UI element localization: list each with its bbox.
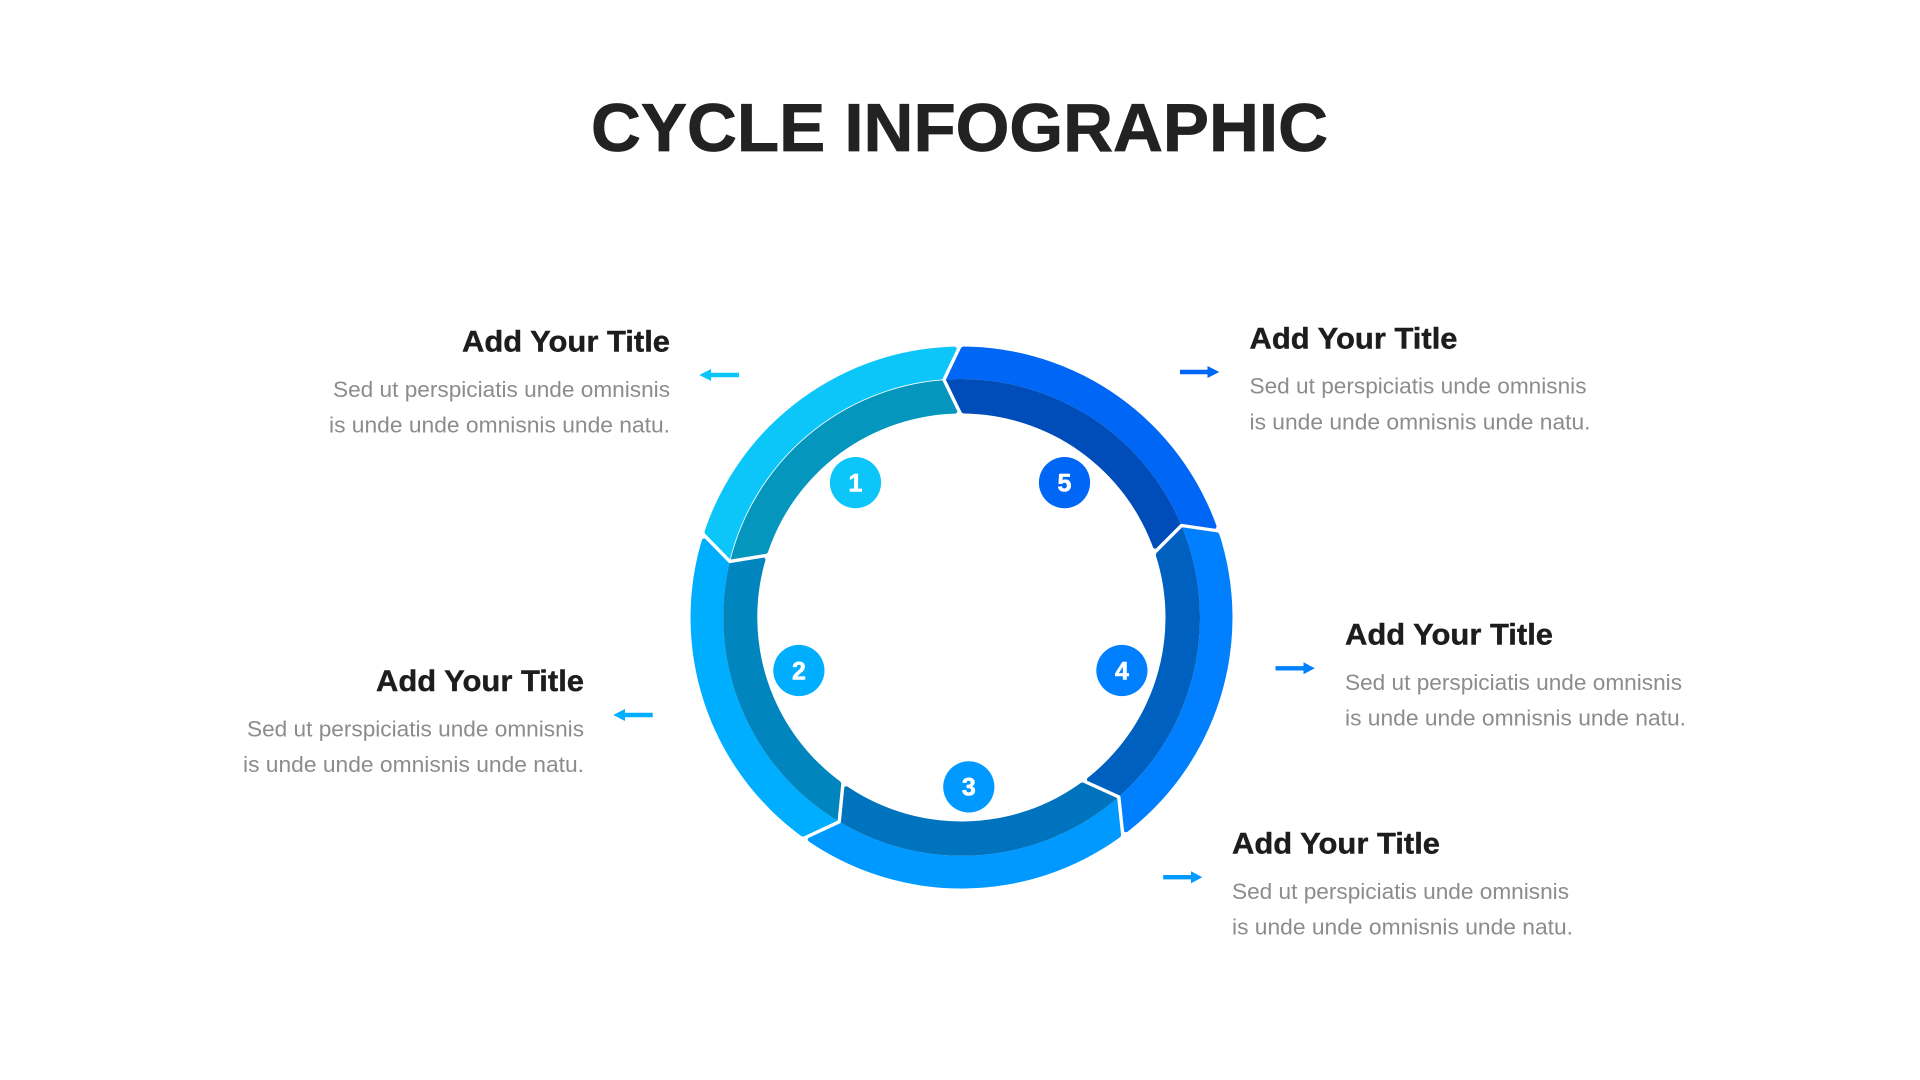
body 1: Sed ut perspiciatis unde omnisnis (333, 377, 670, 402)
body 5: Sed ut perspiciatis unde omnisnis (1250, 374, 1586, 398)
text block 1 (329, 326, 670, 438)
body 2: Sed ut perspiciatis unde omnisnis (247, 716, 584, 742)
body 4: Sed ut perspiciatis unde omnisnis (1345, 670, 1682, 695)
badge 4: 4 (1115, 657, 1129, 685)
badge 3 (943, 761, 994, 813)
body 5: is unde unde omnisnis unde natu. (1250, 409, 1590, 434)
badge 5: 5 (1058, 470, 1072, 498)
badge 1: 1 (849, 470, 863, 498)
segment 1 (704, 346, 960, 561)
text block 5 (1250, 322, 1590, 434)
badge 2 (773, 645, 825, 696)
badge 2: 2 (792, 657, 806, 685)
body 4: is unde unde omnisnis unde natu. (1345, 706, 1686, 730)
badge 4 (1096, 645, 1148, 696)
heading 2: Add Your Title (376, 665, 584, 698)
body 5 (1250, 374, 1590, 434)
body 2 (243, 716, 584, 777)
body 1: is unde unde omnisnis unde natu. (329, 412, 670, 438)
heading 1: Add Your Title (462, 326, 670, 358)
badge 5 (1039, 457, 1090, 508)
cycle ring (691, 346, 1232, 889)
arrow 3 (1163, 871, 1202, 883)
body 2: is unde unde omnisnis unde natu. (243, 752, 584, 777)
badge 3: 3 (962, 774, 976, 802)
heading 4: Add Your Title (1345, 618, 1553, 652)
segment 2 (691, 535, 843, 838)
arrow 1 (699, 369, 739, 381)
body 1 (329, 377, 670, 438)
segment 5 (944, 346, 1218, 552)
segment 3 (804, 781, 1123, 889)
body 3: Sed ut perspiciatis unde omnisnis (1232, 879, 1569, 904)
body 4 (1345, 670, 1686, 730)
arrow 2 (613, 709, 653, 721)
title: CYCLE INFOGRAPHIC (591, 90, 1328, 166)
heading 5: Add Your Title (1250, 322, 1458, 355)
body 3: is unde unde omnisnis unde natu. (1232, 914, 1573, 940)
body 3 (1232, 879, 1573, 940)
badge 1 (830, 457, 881, 508)
heading 3: Add Your Title (1232, 828, 1440, 860)
arrow 5 (1180, 366, 1219, 378)
text block 2 (243, 665, 584, 777)
arrow 4 (1276, 662, 1315, 674)
text block 3 (1232, 828, 1573, 940)
text block 4 (1345, 618, 1686, 730)
segment 4 (1084, 526, 1232, 835)
